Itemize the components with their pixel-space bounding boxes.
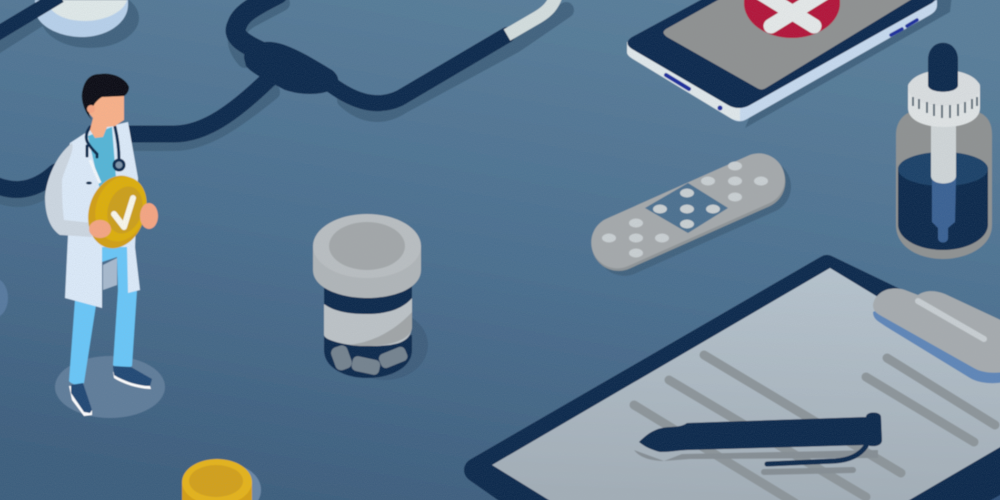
hair bbox=[82, 74, 129, 120]
pen bbox=[634, 412, 882, 472]
paper lines bbox=[634, 355, 995, 500]
clipboard clip bbox=[873, 288, 1000, 383]
clipboard board bbox=[476, 267, 1000, 500]
bandage pad bbox=[645, 183, 728, 233]
pill bottle body bbox=[324, 290, 412, 346]
dropper bottle bbox=[896, 43, 992, 259]
lanyard bbox=[90, 160, 100, 183]
bandage bbox=[590, 152, 791, 276]
bottle body bbox=[896, 110, 992, 259]
ear bbox=[87, 105, 95, 113]
bandage dots bbox=[602, 162, 768, 258]
phone screen bbox=[663, 0, 917, 90]
phone side bbox=[627, 0, 937, 121]
pill bottle bbox=[313, 214, 428, 380]
top-left disc with tube bbox=[0, 0, 139, 48]
doctor bbox=[45, 74, 165, 418]
shoes bbox=[69, 366, 152, 416]
clipboard paper bbox=[492, 268, 1000, 500]
scrub shirt bbox=[88, 127, 116, 190]
legs bbox=[69, 300, 96, 385]
pill bottle shadow bbox=[374, 318, 428, 380]
left edge circle bbox=[0, 278, 8, 318]
phone ports bbox=[666, 20, 917, 110]
clipboard shadow bbox=[990, 494, 1000, 500]
stethoscope junction bbox=[244, 42, 338, 94]
coat bbox=[55, 122, 140, 308]
dropper tube bbox=[931, 178, 956, 244]
coin held bbox=[79, 168, 155, 256]
bottle cap bbox=[907, 82, 981, 127]
dropper bulb bbox=[928, 43, 958, 92]
hands bbox=[140, 203, 158, 229]
gold coin bottom bbox=[182, 459, 261, 500]
pill bottle band bbox=[324, 285, 412, 314]
floor disc bbox=[55, 356, 165, 418]
pill bottle bottom with pills bbox=[324, 335, 412, 378]
phone bbox=[627, 0, 952, 128]
neck and face bbox=[88, 95, 124, 138]
clipboard bbox=[476, 267, 1000, 500]
coat button bbox=[86, 182, 92, 184]
stethoscope bbox=[0, 0, 566, 199]
phone shadow bbox=[745, 0, 952, 128]
red circle with cross bbox=[744, 0, 840, 38]
sleeve bbox=[45, 143, 92, 237]
bottle liquid bbox=[898, 168, 988, 250]
under coat bbox=[103, 258, 117, 290]
pill bottle cap bbox=[313, 245, 421, 298]
phone face bbox=[628, 0, 937, 108]
stethoscope on neck bbox=[86, 127, 124, 170]
check mark bbox=[114, 198, 133, 227]
